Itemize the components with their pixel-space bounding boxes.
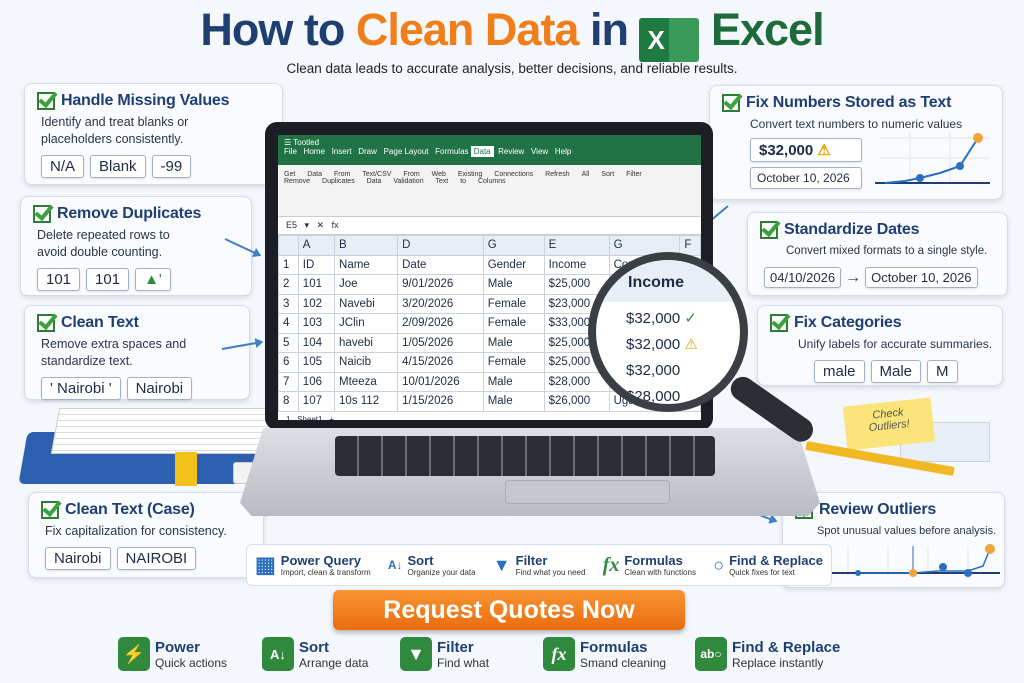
panel: standardize dates [747,212,1008,296]
bottom tools row: Find what [437,656,489,670]
excel screen: 4/15/2026 [402,356,453,368]
title: X [647,25,664,55]
icon: notebook [19,408,270,486]
bottom tools row: Find & Replace [732,638,840,656]
excel screen: Income [549,259,586,271]
excel screen: Gender [488,259,526,271]
toolbar strip: ○ [713,554,724,574]
excel screen: $28,000 [549,376,590,388]
excel screen: Male [488,337,513,349]
toolbar strip: fx [603,554,619,576]
chart: outliers [832,544,1000,577]
toolbar strip: Quick fixes for text [729,568,795,577]
bottom tools row: Power [155,638,200,656]
excel screen: ID [303,259,314,271]
excel screen: 6 [283,356,289,368]
sticky note: Outliers! [868,418,910,434]
excel screen: Female [488,317,526,329]
bottom tools row: A↓ [270,646,286,662]
toolbar strip: Clean with functions [624,568,696,577]
excel screen: Kenya [614,376,646,388]
panel: handle missing values: placeholders consistently. [41,132,183,146]
excel screen: havebi [339,337,373,349]
toolbar strip: A↓ [388,558,403,572]
excel screen: 1/15/2026 [402,395,453,407]
excel screen: 3 [283,298,289,310]
sticky note [806,398,990,476]
panel: fix categories: Male [880,363,912,380]
panel: standardize dates: Convert mixed formats to a single style. [786,245,987,257]
panel: fix categories: male [823,363,856,380]
excel screen: Rwanda [614,356,656,368]
panel: standardize dates: Standardize Dates [784,221,919,238]
panel: clean text: Remove extra spaces and [41,337,186,351]
excel screen: Get Data From Text/CSV From Web Existing Connections Refresh All Sort Filter Remove Duplicates Data Validation Text to Columns [284,171,642,185]
panel: handle missing values: Identify and treat blanks or [41,115,188,129]
panel: fix categories [757,305,1003,386]
button: request quotes [333,590,685,630]
panel: handle missing values: Handle Missing Values [61,92,229,109]
bottom tools row: Replace instantly [732,656,823,670]
excel screen [278,135,701,420]
excel screen: $23,000 [549,298,590,310]
excel screen: 5 [283,337,289,349]
bottom tools row: Arrange data [299,656,368,670]
bottom tools row: Filter [437,638,474,656]
panel: remove duplicates: Delete repeated rows to [37,228,170,242]
panel: handle missing values: Blank [99,158,137,175]
excel screen: File Home Insert Draw Page Layout Formulas Data Review View Help [284,147,571,156]
toolbar strip: Filter [516,553,547,568]
toolbar strip [246,544,832,586]
toolbar strip: ▦ [255,552,276,577]
excel screen: G [488,239,497,251]
panel: standardize dates: 04/10/2026 [770,270,835,285]
bottom tools row: Sort [299,638,329,656]
excel screen: 4 [283,317,289,329]
excel screen: ☰ Tootled [284,138,319,147]
magnifier: $28,000 [626,388,680,405]
panel: fix numbers stored as text: Convert text numbers to numeric values [750,117,962,131]
panel: fix numbers stored as text: Fix Numbers Stored as Text [746,94,951,111]
excel screen: Country [614,259,654,271]
excel screen: 9/01/2026 [402,278,453,290]
panel: clean text case: NAIROBI [126,550,187,567]
panel: handle missing values: -99 [161,158,182,175]
excel screen: $33,000 [549,317,590,329]
panel: clean text [24,305,250,400]
subtitle: Clean data leads to accurate analysis, better decisions, and reliable results. [286,61,738,76]
excel screen: Kenya [614,337,646,349]
excel screen: Joe [339,278,358,290]
panel: review outliers: Review Outliers [819,501,936,518]
panel: remove duplicates: 101 [46,271,71,288]
panel: remove duplicates [20,196,252,296]
toolbar strip: ▼ [493,554,511,574]
excel screen: Name [339,259,370,271]
title: How to Clean Data in Excel [200,4,824,55]
panel: clean text case: Clean Text (Case) [65,501,195,518]
arrows [222,126,938,668]
excel screen: $26,000 [549,395,590,407]
excel screen: 1 [283,259,289,271]
panel: remove duplicates: avoid double counting. [37,245,162,259]
excel screen: G [614,239,623,251]
panel: remove duplicates: 101 [95,271,120,288]
toolbar strip: Organize your data [408,568,476,577]
bottom tools row: ⚡ [123,644,145,664]
excel screen: Uganda [614,298,654,310]
excel screen: 107 [303,395,322,407]
panel: fix categories: Unify labels for accurate summaries. [798,337,992,351]
excel screen: Female [488,298,526,310]
excel screen: F [684,239,691,251]
chart: trend line [875,133,990,184]
magnifier: $32,000 ✓ [626,310,697,327]
excel screen: 7 [283,376,289,388]
excel screen: Kenya [614,278,646,290]
excel screen: Date [402,259,426,271]
magnifier [588,252,813,442]
excel screen: E [549,239,556,251]
excel screen: D [402,239,410,251]
bottom tools row [118,637,840,671]
panel: clean text case: Nairobi [54,550,102,567]
panel: fix numbers stored as text [709,85,1003,200]
magnifier: Income [628,274,684,291]
excel screen: 3/20/2026 [402,298,453,310]
excel screen: 1/05/2026 [402,337,453,349]
excel screen: Mteeza [339,376,377,388]
panel: fix numbers stored as text: $32,000 ⚠ [759,142,831,159]
excel screen: Male [488,376,513,388]
toolbar strip: Import, clean & transform [281,568,371,577]
excel screen: 105 [303,356,322,368]
excel screen: Naicib [339,356,371,368]
excel screen: Male [488,395,513,407]
excel screen: $25,000 [549,337,590,349]
toolbar strip: Formulas [624,553,683,568]
excel screen: $25,000 [549,356,590,368]
panel: review outliers: Spot unusual values before analysis. [817,525,996,537]
toolbar strip: Sort [408,553,434,568]
panel: clean text: standardize text. [41,354,133,368]
panel: clean text: Nairobi [136,380,183,397]
panel: standardize dates: → [845,268,861,286]
panel: clean text case: Fix capitalization for consistency. [45,524,227,538]
excel screen: 106 [303,376,322,388]
bottom tools row: Quick actions [155,656,227,670]
panel: standardize dates: October 10, 2026 [871,270,972,285]
excel screen: Tanzania [614,317,660,329]
bottom tools row: ab○ [700,647,722,661]
bottom tools row: ▼ [407,644,425,664]
bottom tools row: fx [552,644,566,664]
bottom tools row: Formulas [580,638,648,656]
excel screen: 101 [303,278,322,290]
button: request quotes: Request Quotes Now [383,596,635,624]
excel screen: JClin [339,317,365,329]
excel screen: B [339,239,347,251]
panel: fix categories: Fix Categories [794,314,901,331]
magnifier: $32,000 ⚠ [626,336,698,353]
excel screen: E5 ▾ ✕ fx [286,220,339,230]
panel: clean text: Clean Text [61,314,139,331]
excel screen: 103 [303,317,322,329]
excel screen: 2/09/2026 [402,317,453,329]
panel: clean text case [28,492,264,578]
panel: review outliers [782,492,1005,588]
excel screen: $25,000 [549,278,590,290]
toolbar strip: Find & Replace [729,553,823,568]
excel screen: 2 [283,278,289,290]
excel screen: Female [488,356,526,368]
toolbar strip: Power Query [281,553,361,568]
excel screen: Uganda [614,395,654,407]
bottom tools row: Smand cleaning [580,656,666,670]
excel screen: 8 [283,395,289,407]
laptop [240,122,820,516]
sticky note: Check [872,406,904,422]
excel screen: 10s 112 [339,395,379,407]
toolbar strip: Find what you need [516,568,585,577]
panel: clean text: ' Nairobi ' [50,380,112,397]
excel screen: Navebi [339,298,375,310]
panel: remove duplicates: ▲' [144,271,162,288]
excel screen: A [303,239,310,251]
panel: handle missing values: N/A [50,158,75,175]
panel: fix numbers stored as text: October 10, 2026 [757,171,850,185]
panel: fix categories: M [936,363,949,380]
magnifier: $32,000 [626,362,680,379]
excel screen: 10/01/2026 [402,376,460,388]
excel screen: Male [488,278,513,290]
excel screen: 104 [303,337,322,349]
panel: remove duplicates: Remove Duplicates [57,205,201,222]
excel screen: 102 [303,298,322,310]
panel: handle missing values [24,83,283,185]
